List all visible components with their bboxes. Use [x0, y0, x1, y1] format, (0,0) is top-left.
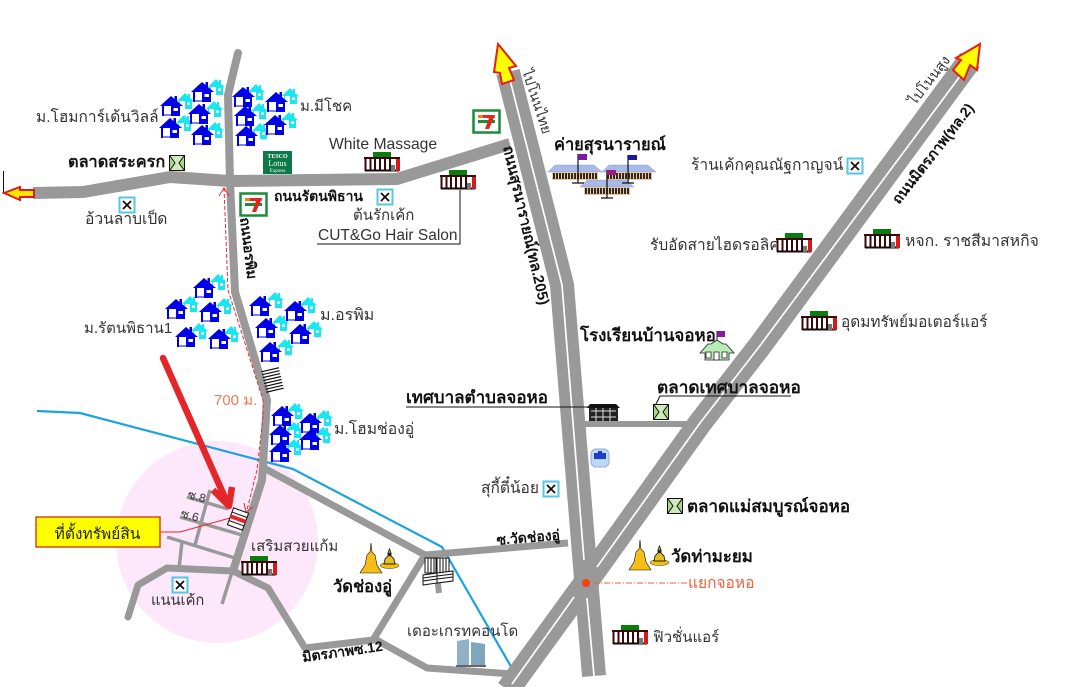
road: ถนนรัตนพิธาน [33, 144, 510, 193]
temple: วัดท่ามะยม [629, 540, 753, 570]
village: ม.โฮมช่องอู่ [269, 403, 414, 462]
road: municipal side road [436, 424, 692, 593]
road: small side sois [167, 490, 242, 604]
shop: หจก. ราชสีมาสหกิจ: หจก. ราชสีมาสหกิจ [905, 232, 1039, 250]
restaurant: อ้วนลาบเป็ด: อ้วนลาบเป็ด [85, 208, 167, 228]
badge: blue sign [591, 449, 609, 467]
shop: เสริมสวยแก้ม: เสริมสวยแก้ม [251, 538, 338, 555]
crossing: soi zebra [423, 558, 453, 585]
temple: วัดช่องอู่: วัดช่องอู่ [333, 578, 392, 598]
distance label: 700 ม.: 700 ม. [214, 392, 257, 409]
village: ม.รัตนพิธาน1: ม.รัตนพิธาน1 [84, 320, 172, 337]
road dividers [508, 60, 972, 684]
logo: 7-Eleven north [474, 110, 500, 132]
market: ตลาดเทศบาลจอหอ [654, 377, 801, 420]
shop: อุดมทรัพย์มอเตอร์แอร์: อุดมทรัพย์มอเตอร์แอร์ [841, 313, 988, 332]
shop: อุดมทรัพย์มอเตอร์แอร์ [801, 311, 988, 332]
route: dashed 700 m [219, 188, 263, 512]
arrow: to west [4, 171, 34, 200]
big red pointer arrow [163, 358, 232, 506]
restaurant: ต้นรักเค้ก [353, 190, 414, 224]
road: local ring [128, 555, 425, 648]
village: ม.โฮมช่องอู่: ม.โฮมช่องอู่ [334, 419, 414, 439]
shop: White Massage [329, 136, 437, 172]
soi labels [179, 487, 208, 525]
river [37, 411, 517, 677]
village: ม.มีโชค [232, 84, 352, 146]
road: ถนนอรพิม [228, 53, 267, 571]
arrow: to Non Sung [953, 44, 980, 80]
restaurant: ร้านเค้กคุณณัฐกาญจน์: ร้านเค้กคุณณัฐกาญจน์ [691, 156, 844, 175]
leader line [160, 518, 230, 532]
road: southeast branch [262, 467, 568, 555]
label box [36, 517, 160, 547]
shop: CUT&Go Hair Salon: CUT&Go Hair Salon [318, 227, 458, 244]
temple: วัดช่องอู่ [333, 543, 399, 598]
shop: เสริมสวยแก้ม [241, 538, 338, 576]
shop: CUT&Go Hair Salon [317, 170, 476, 244]
shop: ฟิวชั่นแอร์ [612, 625, 719, 646]
condo: เดอะเกรทคอนโด: เดอะเกรทคอนโด [407, 622, 518, 640]
road label: ถนนมิตรภาพ: ถนนมิตรภาพ(ทล.2) [889, 100, 978, 207]
condo: เดอะเกรทคอนโด [407, 622, 518, 667]
junction: แยกจอหอ [582, 575, 754, 592]
arrow: to Non Thai [494, 44, 516, 84]
label box: ที่ตั้งทรัพย์สิน [55, 522, 141, 543]
military camp: ค่ายสุรนารายณ์ [548, 135, 666, 198]
village: ม.โฮมการ์เด้นวิลล์: ม.โฮมการ์เด้นวิลล์ [36, 108, 159, 126]
market: ตลาดสระครก: ตลาดสระครก [68, 153, 165, 171]
school: โรงเรียนบ้านจอหอ [579, 325, 734, 360]
road: ถนนสุรนารายณ์ [508, 72, 594, 676]
road label: ไปโนนสูง: ไปโนนสูง [904, 52, 954, 109]
restaurant: ต้นรักเค้ก: ต้นรักเค้ก [353, 207, 414, 224]
restaurant: แนนเค้ก: แนนเค้ก [151, 592, 204, 609]
village: ม.รัตนพิธาน1 [84, 274, 240, 349]
road label: มิตรภาพซ.12: มิตรภาพซ.12 [301, 638, 384, 665]
village: ม.มีโชค: ม.มีโชค [300, 97, 352, 115]
market: ตลาดเทศบาลจอหอ: ตลาดเทศบาลจอหอ [657, 377, 801, 397]
village: ม.โฮมการ์เด้นวิลล์ [36, 79, 225, 145]
school: โรงเรียนบ้านจอหอ: โรงเรียนบ้านจอหอ [579, 325, 716, 345]
pink highlight circle around property area [116, 441, 318, 643]
soi labels: ซ.8 [186, 487, 208, 506]
restaurant: สุกี้ตี๋น้อย [481, 475, 558, 498]
shop: White Massage: White Massage [329, 136, 437, 153]
road label: ถนนอรพิม: ถนนอรพิม [237, 216, 260, 280]
road: ถนนมิตรภาพ [508, 60, 970, 687]
road label: ถนนสุรนารายณ์: ถนนสุรนารายณ์(ทล.205) [498, 144, 553, 307]
road: condo road [373, 638, 513, 674]
road label: ถนนรัตนพิธาน: ถนนรัตนพิธาน [274, 188, 363, 204]
road label: ซ.วัดช่องอู่: ซ.วัดช่องอู่ [496, 527, 561, 549]
logo: Tesco Lotus Express: Lotus [268, 159, 287, 168]
logo: Tesco Lotus Express: TESCO [267, 154, 288, 160]
soi labels: ซ.6 [179, 506, 201, 525]
village: ม.อรพิม [249, 292, 374, 362]
municipal office: เทศบาลตำบลจอหอ [406, 388, 620, 421]
property marker [36, 508, 249, 547]
logo: 7-Eleven intersection [240, 194, 266, 216]
restaurant: แนนเค้ก [151, 578, 204, 609]
shop: ฟิวชั่นแอร์: ฟิวชั่นแอร์ [653, 626, 719, 646]
junction: แยกจอหอ: แยกจอหอ [688, 575, 754, 592]
village: ม.อรพิม: ม.อรพิม [320, 307, 374, 324]
restaurant: อ้วนลาบเป็ด [85, 198, 167, 228]
logo: Tesco Lotus Express: Express [270, 169, 285, 174]
military camp: ค่ายสุรนารายณ์: ค่ายสุรนารายณ์ [554, 135, 666, 155]
restaurant: สุกี้ตี๋น้อย: สุกี้ตี๋น้อย [481, 475, 539, 498]
crossing: north zebra [261, 368, 284, 392]
temple: วัดท่ามะยม: วัดท่ามะยม [671, 547, 753, 566]
shop: รับอัดสายไฮดรอลิค [650, 233, 812, 254]
shop: รับอัดสายไฮดรอลิค: รับอัดสายไฮดรอลิค [650, 236, 780, 254]
road label: ไปโนนไทย: ไปโนนไทย [519, 66, 555, 136]
shop: หจก. ราชสีมาสหกิจ [864, 229, 1039, 250]
market: ตลาดแม่สมบูรณ์จอหอ: ตลาดแม่สมบูรณ์จอหอ [687, 496, 850, 518]
logo: Tesco Lotus Express [263, 151, 292, 174]
municipal office: เทศบาลตำบลจอหอ: เทศบาลตำบลจอหอ [406, 388, 548, 407]
property building [227, 508, 249, 530]
